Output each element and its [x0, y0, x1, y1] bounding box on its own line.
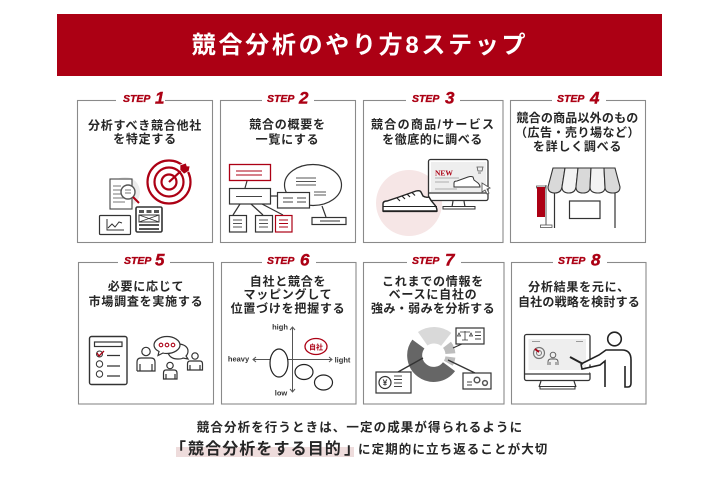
step 1 label [123, 88, 164, 108]
callout: yen [376, 358, 423, 393]
icon: red banner flag [536, 185, 552, 228]
step 6 text: マッピングして [244, 286, 332, 302]
callout: yen: ¥ [383, 378, 388, 388]
step 7 label: STEP [412, 255, 440, 267]
icon: target with arrow [148, 160, 190, 204]
icon: sneaker [383, 191, 437, 212]
step 7 text [371, 274, 495, 316]
positioning map: light [335, 356, 351, 364]
step 7 label [412, 250, 456, 270]
step 7 text: これまでの情報を [382, 274, 484, 288]
icon: monitor: NEW [435, 168, 453, 178]
step 6 text [231, 274, 345, 316]
step 4 label: 4 [589, 88, 600, 108]
step 6 label [267, 250, 310, 270]
step 4 label [557, 88, 600, 108]
step 5 text: 市場調査を実施する [89, 294, 203, 308]
step 3 text: 競合の商品/サービス [371, 116, 494, 132]
panel: step 5 [78, 250, 214, 404]
panel: step 2 [220, 88, 356, 242]
icon: line chart [100, 216, 130, 234]
icon: monitor [428, 160, 490, 209]
step 7 text: ベースに自社の [389, 286, 477, 302]
step 2 text [249, 116, 326, 146]
icon: wireframe [136, 207, 162, 232]
step 1 text: 分析すべき競合他社 [88, 118, 202, 132]
step 8 label: STEP [558, 255, 586, 267]
step 2 label: STEP [267, 93, 295, 105]
step 8 label [558, 250, 601, 270]
icon: documents with magnifier [110, 177, 140, 209]
callout: scales [453, 328, 484, 348]
step 4 label: STEP [557, 93, 585, 105]
icon: checklist [90, 336, 127, 384]
panel: step 7 [364, 250, 504, 404]
step 6 text: 自社と競合を [250, 274, 326, 288]
step 4 text: 競合の商品以外のもの [516, 110, 639, 125]
step 2 text: 競合の概要を [249, 116, 326, 132]
step 4 text: （広告・売り場など） [515, 124, 640, 140]
step 6 label: 6 [300, 250, 310, 270]
panel: step 4 [510, 88, 646, 242]
callout: gears [448, 360, 491, 389]
step 4 text: を詳しく調べる [533, 138, 622, 154]
bottom message: に定期的に立ち返ることが大切 [358, 442, 548, 456]
panel: step 6 [222, 250, 356, 404]
icon: presentation monitor [524, 334, 590, 389]
bottom message: 競合分析をする目的 [188, 439, 342, 458]
title banner [57, 14, 662, 76]
donut chart [415, 335, 450, 374]
icon: diagram of boxes [230, 164, 346, 232]
step 8 text: 自社の戦略を検討する [518, 294, 640, 309]
step 3 label [412, 88, 455, 108]
positioning map: high [272, 322, 288, 332]
panel: step 8 [512, 250, 646, 404]
icon: people talking [137, 336, 202, 379]
bottom message: 競合分析を行うときは、一定の成果が得られるように [197, 420, 523, 434]
icon: presenter [570, 332, 631, 387]
step 2 label: 2 [298, 88, 309, 108]
step 7 label: 7 [445, 250, 456, 270]
step 5 label: 5 [155, 250, 165, 270]
step 5 text: 必要に応じて [108, 278, 184, 294]
step 6 label: STEP [267, 255, 295, 267]
step 5 label [124, 250, 165, 270]
step 8 text: 分析結果を元に、 [528, 279, 630, 294]
bottom message: 「 [170, 440, 186, 458]
step 1 text [88, 118, 202, 146]
step 3 text: を徹底的に調べる [382, 132, 483, 146]
positioning map: 自社 [309, 342, 323, 352]
title banner: 競合分析のやり方8ステップ [192, 32, 528, 59]
positioning map: heavy [228, 354, 250, 364]
step 1 label: STEP [123, 93, 151, 105]
step 6 text: 位置づけを把握する [231, 300, 345, 316]
step 8 text [518, 279, 640, 309]
panel: step 1 [78, 88, 212, 242]
step 2 label [267, 88, 309, 108]
icon: storefront [548, 168, 620, 228]
step 5 label: STEP [124, 255, 152, 267]
step 3 text [371, 116, 494, 146]
step 3 label: 3 [445, 88, 455, 108]
step 3 label: STEP [412, 93, 440, 105]
step 7 text: 強み・弱みを分析する [371, 300, 495, 316]
step 4 text [515, 110, 640, 154]
bottom message: 」 [344, 441, 360, 458]
panel: step 3 [364, 88, 503, 242]
step 1 label: 1 [155, 88, 164, 108]
positioning map [228, 322, 351, 398]
step 8 label: 8 [591, 250, 601, 270]
step 5 text [89, 278, 203, 308]
positioning map: low [275, 388, 287, 398]
step 1 text: を特定する [113, 131, 177, 146]
step 2 text: 一覧にする [256, 132, 319, 146]
icon: pink circle [376, 170, 442, 236]
bottom message [170, 420, 548, 458]
